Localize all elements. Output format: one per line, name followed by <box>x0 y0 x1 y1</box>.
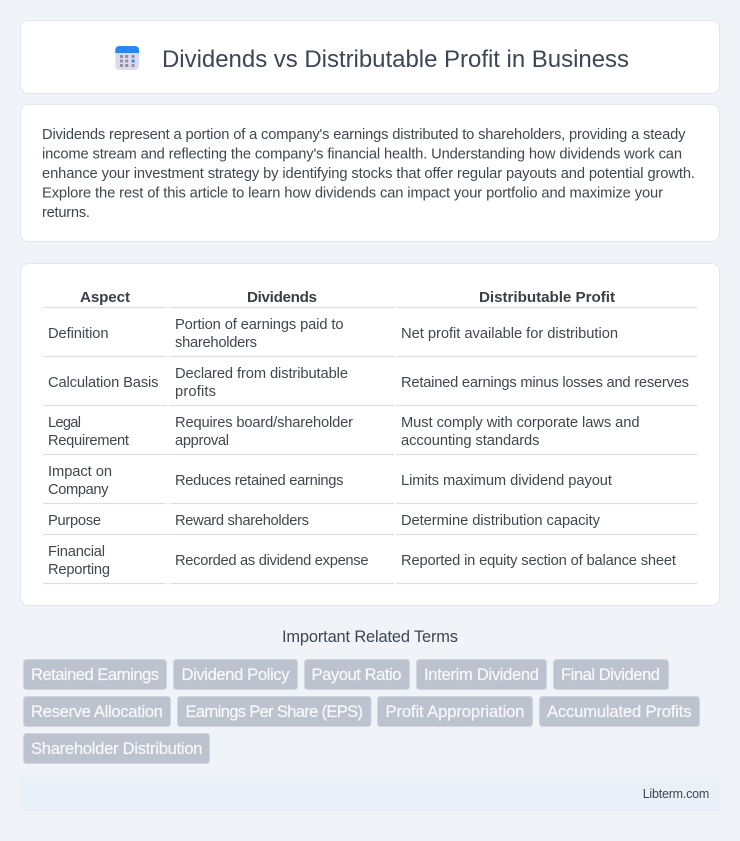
table row: financial reporting: Reporting <box>48 562 110 578</box>
footer bar <box>20 777 720 811</box>
panel: comparison table <box>20 264 720 606</box>
table row: definition: Net profit available for distribution <box>401 326 618 342</box>
table row: definition: shareholders <box>175 335 257 351</box>
tag: shareholder distribution <box>24 734 210 764</box>
text block: introduction paragraph <box>42 127 695 221</box>
tag: profit appropriation <box>378 696 532 726</box>
table row: legal requirement: Legal <box>48 415 81 431</box>
tag: earnings per share: Earnings Per Share (EPS) <box>186 702 363 721</box>
panel: header <box>20 20 720 94</box>
table header row: Aspect <box>80 289 130 306</box>
table row: impact on company: Impact on <box>48 464 112 480</box>
table row: financial reporting: Financial <box>48 544 105 560</box>
table row: calculation basis: Calculation Basis <box>48 375 158 391</box>
heading: important related terms: Important Related Terms <box>282 628 458 646</box>
text block: introduction paragraph: enhance your investment strategy by identifying stocks that offer regular payouts and potential growth. <box>42 166 695 182</box>
tag: dividend policy <box>174 660 298 690</box>
table row: definition <box>48 317 618 351</box>
table row: calculation basis: Retained earnings minus losses and reserves <box>401 375 689 391</box>
tag: retained earnings <box>24 660 166 690</box>
table row: legal requirement: Requirement <box>48 433 129 449</box>
tag: interim dividend: Interim Dividend <box>424 665 539 684</box>
table row: financial reporting: Reported in equity section of balance sheet <box>401 553 676 569</box>
text block: introduction paragraph: income stream and reflecting the company's financial health. Understanding how dividends work can <box>42 146 682 162</box>
table header row <box>80 289 615 306</box>
table row: impact on company: Reduces retained earnings <box>175 473 344 489</box>
tag: retained earnings: Retained Earnings <box>31 665 159 684</box>
tag: payout ratio: Payout Ratio <box>312 665 402 684</box>
table row: financial reporting: Recorded as dividend expense <box>175 553 368 569</box>
table row: purpose: Determine distribution capacity <box>401 513 601 529</box>
table row: impact on company: Company <box>48 482 109 498</box>
tag: payout ratio <box>304 660 410 690</box>
table header row: Dividends <box>247 289 317 306</box>
table row: calculation basis: profits <box>175 384 216 400</box>
text block: introduction paragraph: Explore the rest of this article to learn how dividends can impact your portfolio and maximize your <box>42 186 663 202</box>
tag: shareholder distribution: Shareholder Distribution <box>31 739 202 758</box>
related term tags <box>24 660 700 764</box>
tag: profit appropriation: Profit Appropriation <box>386 702 524 721</box>
table row: purpose <box>48 513 601 529</box>
table row: calculation basis: Declared from distributable <box>175 366 348 382</box>
table row: impact on company: Limits maximum dividend payout <box>401 473 612 489</box>
tag: interim dividend <box>416 660 546 690</box>
tag: accumulated profits <box>540 696 700 726</box>
footer credit: Libterm.com <box>643 787 709 801</box>
table row: definition: Portion of earnings paid to <box>175 317 344 333</box>
panel: introduction <box>20 104 720 242</box>
table row: definition: Definition <box>48 326 108 342</box>
table row: legal requirement <box>48 415 640 449</box>
table row: legal requirement: approval <box>175 433 229 449</box>
table row: impact on company <box>48 464 612 498</box>
tag: accumulated profits: Accumulated Profits <box>547 702 692 721</box>
tag: dividend policy: Dividend Policy <box>182 665 290 684</box>
title: Dividends vs Distributable Profit in Business <box>162 46 629 73</box>
table header row: Distributable Profit <box>479 289 615 306</box>
text block: introduction paragraph: returns. <box>42 205 90 221</box>
tag: reserve allocation <box>24 696 170 726</box>
tag: reserve allocation: Reserve Allocation <box>31 702 163 721</box>
table row: legal requirement: accounting standards <box>401 433 540 449</box>
tag: earnings per share <box>178 696 371 726</box>
tag: final dividend: Final Dividend <box>561 665 660 684</box>
text block: introduction paragraph: Dividends represent a portion of a company's earnings distributed to shareholders, providing a steady <box>42 127 686 143</box>
table row: purpose: Purpose <box>48 513 101 529</box>
table row: purpose: Reward shareholders <box>175 513 309 529</box>
table row: legal requirement: Must comply with corporate laws and <box>401 415 640 431</box>
table row: calculation basis <box>48 366 689 400</box>
icon: calendar <box>115 46 139 70</box>
tag: final dividend <box>554 660 668 690</box>
table row: financial reporting <box>48 544 676 578</box>
table row: legal requirement: Requires board/shareholder <box>175 415 353 431</box>
